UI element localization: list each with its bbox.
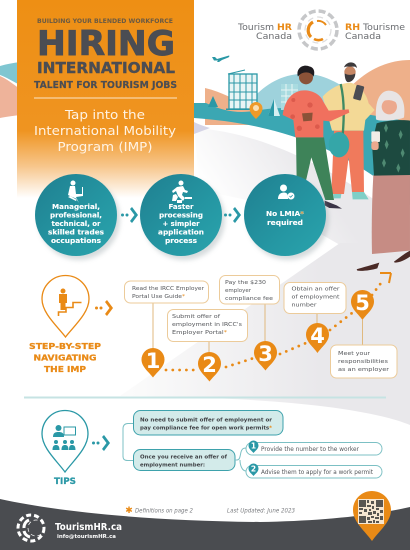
- footnote: definitions: ✱: [125, 506, 133, 516]
- step 3 box: [220, 276, 280, 304]
- step pin 5: [351, 290, 374, 320]
- circle: occupations: [35, 174, 120, 260]
- tips sub bracket: [235, 448, 246, 471]
- heading: step-by-step: [29, 342, 101, 374]
- heading: step-by-step: NAVIGATING: [34, 354, 96, 362]
- tips bracket: [123, 424, 133, 460]
- sub tip 1: 1: [251, 442, 256, 450]
- arrowhead: [380, 273, 391, 283]
- step pin 1: 1: [146, 349, 160, 373]
- logo text right: RH Tourisme: [345, 22, 405, 32]
- circle text: [48, 203, 104, 245]
- logo text right: Canada: [345, 31, 381, 41]
- tip box A: No need to submit offer of employment or: [140, 418, 272, 424]
- circle text: professional,: [50, 212, 102, 220]
- arrow 2: [224, 207, 241, 223]
- icon: orange map pin: [250, 102, 262, 119]
- background: gray road: [120, 128, 410, 425]
- icon: step-by-step pin: [42, 276, 89, 337]
- step 5 box: Meet your: [338, 351, 371, 357]
- dotted path: [166, 279, 384, 370]
- step pin 4: 4: [310, 324, 325, 348]
- step pin 4: [306, 323, 329, 353]
- circle text: Faster: [168, 203, 194, 211]
- logo ring: [299, 11, 337, 49]
- title: HIRING: [37, 24, 175, 64]
- circle text: processing: [159, 212, 203, 220]
- circle text: Managerial,: [52, 203, 100, 211]
- tip box B: Once you receive an offer of: [140, 454, 228, 460]
- logo: Tourism HR Canada: [237, 11, 405, 49]
- circle text: + simpler: [162, 220, 200, 228]
- tip box A: [134, 410, 283, 435]
- step 4 box: Obtain an offer: [292, 286, 340, 292]
- footer band: [0, 499, 410, 550]
- step 1 box: Read the IRCC Employer: [132, 286, 205, 292]
- circle text: required: [267, 219, 303, 227]
- icon: trees: [208, 96, 280, 116]
- arrow 1: [121, 207, 138, 223]
- step 2 box: Submit offer of: [172, 314, 221, 320]
- sub tip 2: 2: [251, 464, 256, 474]
- footer logo: [18, 515, 44, 541]
- circle text: process: [165, 237, 197, 245]
- circle text: skilled trades: [48, 228, 104, 236]
- sub tip 2: [246, 464, 382, 478]
- person: older woman: [357, 91, 410, 271]
- footnote: definitions: Definitions on page 2: [135, 508, 193, 514]
- title: TALENT FOR TOURISM JOBS: [34, 80, 177, 91]
- step pin 2: [198, 352, 221, 382]
- sub tip 2: Advise them to apply for a work permit: [261, 469, 374, 476]
- tip box A: pay compliance fee for open work permits*: [140, 426, 272, 432]
- sub tip 1: [246, 440, 382, 455]
- background: left waves: [0, 62, 20, 118]
- footer contact: info@tourismHR.ca: [57, 534, 116, 540]
- step 1 box: [124, 281, 208, 303]
- person: yellow man: [323, 62, 375, 199]
- step 3 box: compliance fee: [225, 296, 274, 302]
- circle text: [158, 203, 204, 245]
- tip box B: employment number:: [140, 462, 205, 468]
- step pin 1: [142, 348, 164, 378]
- arrow: tips: [92, 435, 110, 451]
- step 4 box: number: [292, 302, 317, 308]
- person: woman in coral sweater: [283, 66, 349, 209]
- tip box B: [134, 450, 235, 470]
- subtitle: Program (IMP): [58, 140, 152, 154]
- footer contact: [55, 522, 122, 540]
- circle: no LMIA: [244, 174, 329, 260]
- subtitle: International Mobility: [34, 124, 176, 138]
- title: INTERNATIONAL: [37, 59, 175, 77]
- step 2 box: Employer Portal *: [172, 330, 227, 336]
- subtitle: [34, 108, 176, 154]
- step pin 5: 5: [355, 291, 370, 315]
- icon: person with check: [278, 184, 294, 200]
- icon: buildings: [226, 70, 298, 110]
- step 2 box: employment in IRCC's: [172, 322, 242, 328]
- step 4 box: of employment: [292, 294, 340, 300]
- circle text: No LMIA*: [266, 210, 304, 218]
- logo text right: [345, 22, 405, 41]
- logo text left: Canada: [256, 31, 292, 41]
- arrow: step-by-step: [95, 300, 113, 316]
- connector lines: [153, 303, 362, 354]
- logo text left: [237, 22, 293, 41]
- circle text: technical, or: [52, 220, 101, 228]
- eyebrow: BUILDING YOUR BLENDED WORKFORCE: [37, 17, 173, 25]
- step 1 box: Portal Use Guide *: [132, 294, 185, 300]
- logo text left: Tourism HR: [237, 22, 293, 32]
- step 5 box: as an employer: [338, 367, 390, 373]
- step 5 box: responsibilities: [338, 359, 388, 365]
- icon: person at desk: [68, 180, 83, 203]
- background: right hills: [194, 60, 410, 205]
- orange title panel: [17, 0, 194, 198]
- people illustration: [283, 62, 410, 271]
- heading: tips: TIPS: [54, 477, 76, 487]
- step 4 box: [284, 282, 346, 314]
- subtitle: Tap into the: [64, 108, 145, 122]
- step 3 box: employer: [225, 288, 252, 294]
- step 3 box: Pay the $230: [225, 280, 266, 286]
- step pin 3: 3: [258, 342, 273, 366]
- title: [34, 24, 177, 91]
- icon: tips pin: [42, 410, 88, 472]
- circle text: [266, 210, 304, 227]
- step pin 2: 2: [202, 353, 217, 377]
- icon: airplane: [212, 56, 229, 62]
- heading: step-by-step: STEP-BY-STEP: [29, 342, 101, 351]
- icon: running person on stairs: [172, 180, 192, 203]
- step pin 3: [254, 341, 277, 370]
- footer contact: TourismHR.ca: [55, 522, 122, 533]
- circle text: occupations: [51, 237, 101, 245]
- sub tip 1: Provide the number to the worker: [261, 446, 360, 453]
- step 2 box: [168, 310, 248, 342]
- footnote: definitions: [125, 506, 193, 516]
- QR pin: [353, 491, 391, 541]
- circle: faster processing: [140, 174, 225, 260]
- footnote: last updated: Last Updated: June 2023: [227, 508, 295, 514]
- step 5 box: [330, 345, 397, 378]
- heading: step-by-step: THE IMP: [44, 365, 86, 374]
- circle text: application: [158, 228, 204, 236]
